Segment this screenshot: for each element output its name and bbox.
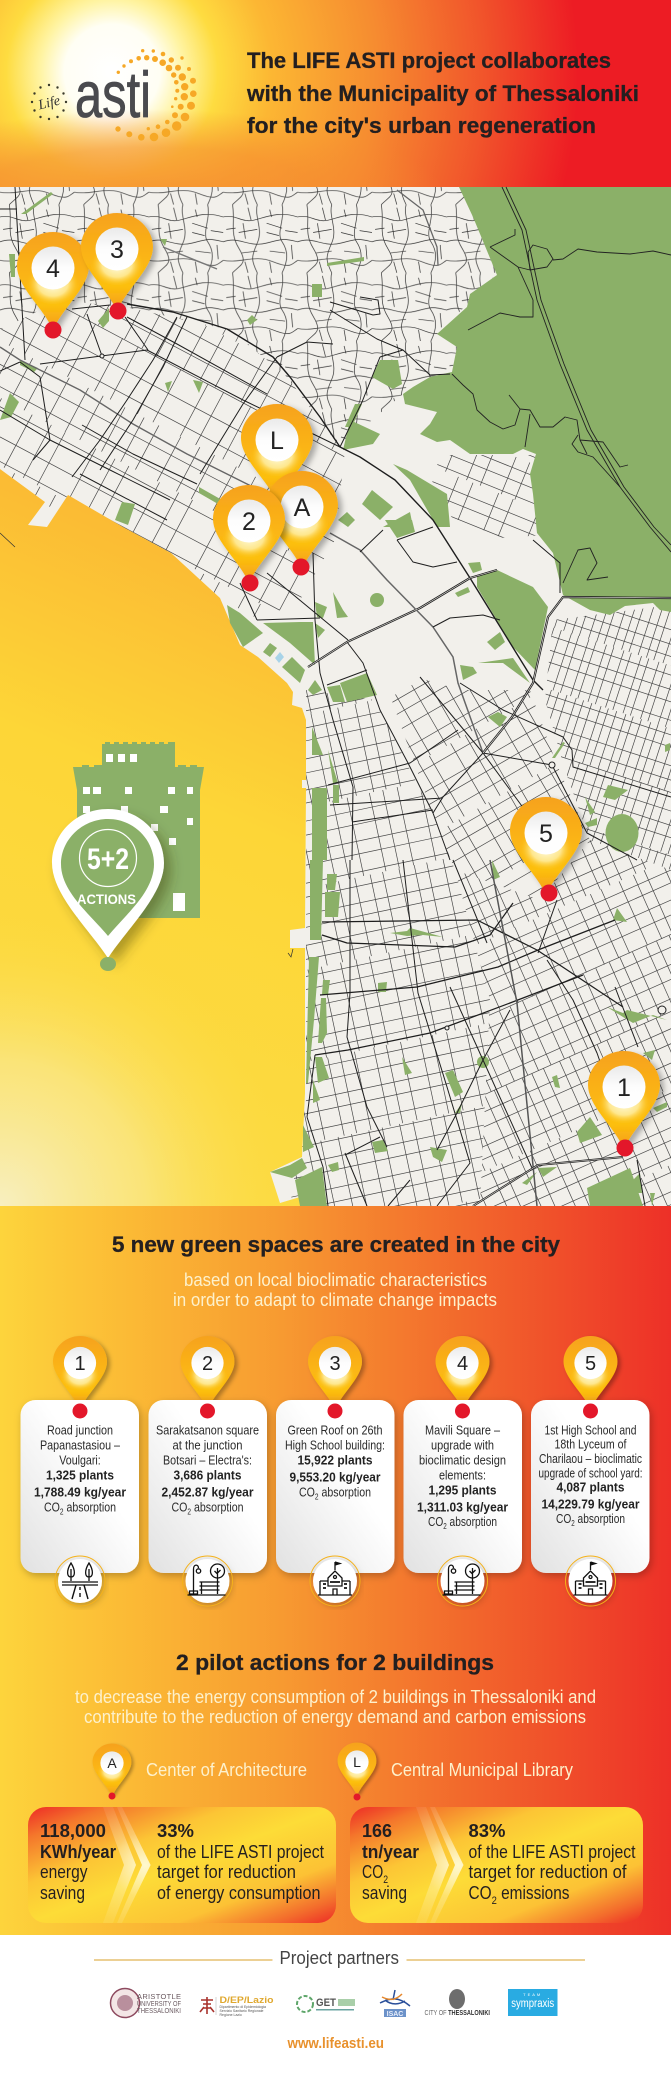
- panel: CO2 saving: tn/year: [362, 1842, 419, 1862]
- map pin 5: [510, 797, 582, 902]
- header band: [0, 0, 671, 188]
- panel: CO2 saving: 166: [362, 1821, 392, 1841]
- subheading: pilot actions: contribute to the reduction of energy demand and carbon emissions: [84, 1707, 586, 1727]
- card 2: Sarakatsanon square: [156, 1422, 259, 1437]
- map of Thessaloniki: [0, 186, 671, 1206]
- map pin 2: [213, 485, 285, 592]
- logo: Aristotle University: ARISTOTLE: [137, 1992, 181, 2001]
- logo: DEP Lazio: D/EP/Lazio: [220, 1995, 274, 2005]
- card 1: Road junction: [47, 1422, 113, 1437]
- map pin 5: 5: [539, 820, 553, 848]
- card 4: 1,295 plants: [428, 1482, 496, 1497]
- map pin L: [241, 404, 313, 498]
- panel: energy saving: [28, 1807, 336, 1923]
- logo: GET: GET: [316, 1997, 336, 2009]
- card 2: at the junction: [172, 1437, 242, 1452]
- card 1: Papanastasiou –: [40, 1437, 121, 1452]
- card 2: 2: [187, 1508, 191, 1516]
- logo: LIFE ASTI: [31, 49, 197, 141]
- card 2: Botsari – Electra's:: [163, 1452, 252, 1467]
- panel: CO2 saving: target for reduction of: [468, 1862, 627, 1882]
- subheading: green spaces: in order to adapt to climate change impacts: [173, 1290, 497, 1310]
- card 1: [20, 1336, 139, 1606]
- card 2: 2,452.87 kg/year: [162, 1484, 254, 1500]
- card 5: Charilaou – bioclimatic: [539, 1451, 642, 1466]
- south-east streets: [458, 840, 671, 1206]
- card 4: 2: [443, 1522, 447, 1531]
- map pin 1: 1: [617, 1074, 631, 1102]
- logo: Aristotle University: [110, 1988, 181, 2018]
- legend: Center of Architecture: [93, 1744, 307, 1800]
- card 2: 3,686 plants: [174, 1467, 242, 1482]
- marker 5+2 actions: [52, 809, 164, 971]
- logo: sympraxis: TEAM: [523, 1992, 542, 1997]
- logo: ISAC: ISAC: [387, 2011, 403, 2018]
- forest and parks: [0, 187, 671, 1206]
- south-west streets: [291, 690, 490, 1206]
- icon: school: [310, 1556, 360, 1606]
- panel: CO2 saving: emissions: [497, 1883, 570, 1903]
- logo: LIFE ASTI: asti: [75, 58, 151, 131]
- map pin 3: 3: [110, 236, 124, 264]
- panel: CO2 saving: CO: [468, 1883, 496, 1903]
- logo: DEP Lazio: Servizio Sanitario Regionale: [220, 2009, 264, 2013]
- panel: CO2 saving: CO: [362, 1862, 389, 1882]
- legend: Central Municipal Library: [338, 1743, 573, 1800]
- panel: energy saving: of energy consumption: [157, 1883, 320, 1903]
- subheading: green spaces: based on local bioclimatic characteristics: [184, 1270, 487, 1290]
- card 1: 1: [74, 1353, 86, 1375]
- forest tracks: [452, 187, 671, 583]
- card 5: 1st High School and: [544, 1422, 636, 1437]
- icon: school: [566, 1556, 616, 1606]
- panel: CO2 saving: [350, 1807, 643, 1923]
- panel: energy saving: of the LIFE ASTI project: [157, 1842, 324, 1862]
- section background: [0, 1206, 671, 1935]
- legend: Central Municipal Library: L: [353, 1754, 361, 1770]
- logo: GET: [297, 1996, 355, 2012]
- card 5: [531, 1336, 650, 1606]
- icon: road with trees: [55, 1556, 105, 1606]
- panel: CO2 saving: saving: [362, 1883, 407, 1903]
- panel: energy saving: 33%: [157, 1821, 194, 1841]
- card 5: upgrade of school yard:: [538, 1465, 642, 1480]
- card 4: [404, 1336, 522, 1606]
- card 4: 1,311.03 kg/year: [417, 1500, 508, 1514]
- panel: CO2 saving: of the LIFE ASTI project: [468, 1842, 636, 1862]
- card 3: Green Roof on 26th: [288, 1422, 382, 1437]
- logo: City of Thessaloniki: CITY OF THESSALONIKI: [424, 2008, 490, 2017]
- card 3: 15,922 plants: [298, 1452, 372, 1467]
- header title: The LIFE ASTI project collaborates: [247, 48, 611, 73]
- card 5: absorption: [575, 1511, 625, 1526]
- logo: City of Thessaloniki: [424, 1989, 490, 2017]
- subheading: pilot actions: to decrease the energy consumption of 2 buildings in Thessaloniki and: [75, 1687, 596, 1707]
- map pin A: [266, 471, 338, 576]
- subheading: green spaces: [173, 1270, 497, 1310]
- header title: for the city's urban regeneration: [247, 113, 596, 138]
- header title: [246, 48, 639, 138]
- card 3: absorption: [319, 1484, 371, 1500]
- card 4: Mavili Square –: [425, 1422, 501, 1437]
- card 4: bioclimatic design: [419, 1452, 506, 1467]
- logo: DEP Lazio: [200, 1995, 274, 2017]
- card 4: upgrade with: [431, 1437, 494, 1452]
- card 2: absorption: [191, 1500, 244, 1514]
- map pin 2: 2: [242, 508, 256, 536]
- map pin L: L: [270, 427, 284, 455]
- panel: energy saving: 118,000: [40, 1821, 106, 1841]
- mid streets: [392, 680, 590, 896]
- logo: LIFE ASTI: Life: [36, 94, 62, 114]
- map pin A: A: [294, 494, 311, 522]
- map pin 1: [588, 1051, 660, 1156]
- heading: 2 pilot actions: 2 pilot actions for 2 buildings: [176, 1650, 494, 1675]
- card 3: High School building:: [285, 1437, 385, 1452]
- card 5: 4,087 plants: [556, 1480, 624, 1495]
- map pin 3: [81, 213, 153, 320]
- central plain streets: [0, 304, 344, 617]
- logo: DEP Lazio: Dipartimento di Epidemiologia: [220, 2005, 266, 2009]
- partners heading: Project partners: [280, 1948, 399, 1968]
- card 2: CO: [172, 1500, 191, 1514]
- card 1: 1,788.49 kg/year: [34, 1484, 126, 1500]
- tower: [73, 742, 204, 918]
- card 1: 1,325 plants: [46, 1467, 114, 1482]
- icon: bench and lamp: [182, 1556, 232, 1606]
- logo: sympraxis: sympraxis: [511, 1998, 554, 2010]
- card 3: 2: [315, 1492, 319, 1502]
- card 2: 2: [202, 1353, 213, 1375]
- heading: 5 new green spaces: 5 new green spaces are created in the city: [112, 1232, 561, 1257]
- card 2: [148, 1336, 267, 1606]
- card 3: CO: [299, 1484, 318, 1500]
- subheading: pilot actions: [75, 1687, 596, 1727]
- card 5: 18th Lyceum of: [554, 1437, 627, 1452]
- logo: Aristotle University: UNIVERSITY OF: [137, 1999, 181, 2008]
- card 1: CO: [44, 1500, 64, 1514]
- card 3: 3: [329, 1353, 341, 1375]
- east dense streets: [546, 606, 671, 870]
- icon: White Tower with 5+2 actions marker: [52, 742, 204, 971]
- card 4: CO: [428, 1514, 448, 1529]
- map pin 4: [17, 232, 89, 338]
- card 4: 4: [457, 1353, 468, 1375]
- card 1: absorption: [64, 1500, 116, 1514]
- card 5: 14,229.79 kg/year: [542, 1497, 640, 1512]
- card 3: [276, 1336, 394, 1606]
- card 4: absorption: [447, 1514, 497, 1529]
- icon: bench and lamp: [438, 1556, 488, 1606]
- footer: [0, 1935, 671, 2081]
- panel: energy saving: energy: [40, 1862, 88, 1882]
- website: www.lifeasti.eu: [287, 2035, 384, 2052]
- map pin 4: 4: [46, 255, 60, 283]
- card 1: 2: [60, 1508, 64, 1516]
- marker 5+2 actions: 5+2: [87, 843, 129, 876]
- card 5: CO: [556, 1511, 576, 1526]
- logo: DEP Lazio: Regione Lazio: [220, 2013, 242, 2017]
- card 5: 5: [585, 1353, 596, 1375]
- card 4: elements:: [439, 1467, 486, 1482]
- card 5: 2: [571, 1519, 575, 1528]
- logo: ISAC: [380, 1990, 410, 2018]
- panel: energy saving: saving: [40, 1883, 85, 1903]
- header title: with the Municipality of Thessaloniki: [246, 81, 639, 106]
- panel: CO2 saving: 2: [383, 1874, 388, 1886]
- panel: energy saving: KWh/year: [40, 1842, 116, 1862]
- legend: Center of Architecture: Center of Architecture: [146, 1760, 307, 1780]
- card 3: 9,553.20 kg/year: [290, 1470, 380, 1484]
- main roads: [0, 187, 671, 1206]
- panel: CO2 saving: 83%: [468, 1821, 506, 1841]
- card 1: Voulgari:: [59, 1452, 101, 1467]
- logo: sympraxis: [508, 1989, 558, 2016]
- legend: Center of Architecture: A: [107, 1755, 117, 1771]
- panel: energy saving: target for reduction: [157, 1862, 296, 1882]
- north-east block streets: [432, 455, 536, 538]
- marker 5+2 actions: ACTIONS: [77, 891, 136, 907]
- panel: CO2 saving: 2: [492, 1895, 497, 1907]
- legend: Central Municipal Library: Central Municipal Library: [391, 1760, 573, 1780]
- logo: Aristotle University: THESSALONIKI: [137, 2006, 181, 2015]
